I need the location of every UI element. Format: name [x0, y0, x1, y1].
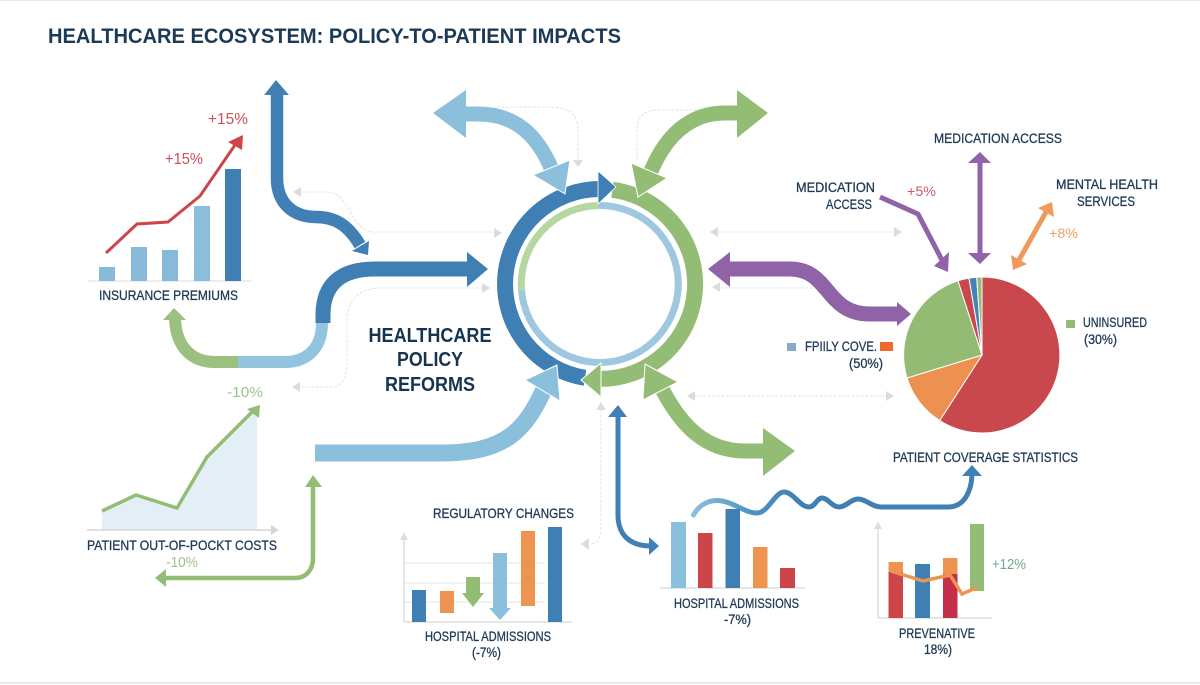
- callout: mental health services: SERVICES: [1077, 194, 1135, 209]
- heading: healthcare policy reforms: [368, 324, 492, 396]
- panel: insurance premiums chart: [88, 111, 252, 303]
- callout: medication access left: +5%: [907, 183, 936, 199]
- callout: medication access left: ACCESS: [826, 197, 872, 212]
- inner ring: [521, 205, 678, 362]
- arrow: lower-right green double arrow: [643, 364, 795, 476]
- panel: patient out-of-pocket costs chart: PATIENT OUT-OF-POCKT COSTS: [87, 538, 277, 553]
- arrow: purple to coverage pie: [708, 252, 911, 326]
- heading: healthcare policy reforms: REFORMS: [385, 373, 475, 396]
- callout: mental health services: MENTAL HEALTH: [1056, 177, 1158, 192]
- panel: preventative care chart: +12%: [992, 557, 1026, 573]
- legend: family coverage: FPIILY COVE.: [805, 339, 877, 354]
- panel: regulatory changes chart: REGULATORY CHANGES: [433, 506, 574, 521]
- panel: preventative care chart: 18%): [924, 642, 952, 657]
- callout: medication access top: MEDICATION ACCESS: [934, 131, 1062, 146]
- heading: healthcare policy reforms: HEALTHCARE: [368, 324, 492, 347]
- callout: medication access top: [934, 131, 1062, 264]
- outer ring green arc: [581, 190, 695, 397]
- panel: insurance premiums chart: +15%: [165, 151, 203, 168]
- title: HEALTHCARE ECOSYSTEM: POLICY-TO-PATIENT IMPACTS: [48, 25, 621, 48]
- callout: mental health services: +8%: [1049, 225, 1078, 241]
- panel: patient coverage pie chart: [904, 277, 1060, 433]
- legend: family coverage: (50%): [849, 356, 883, 371]
- panel: hospital admissions chart: HOSPITAL ADMISSIONS: [674, 596, 799, 611]
- callout: medication access left: [796, 180, 949, 272]
- panel: hospital admissions chart: [660, 509, 805, 627]
- panel: regulatory changes chart: HOSPITAL ADMISSIONS: [425, 629, 551, 644]
- label: patient coverage statistics: PATIENT COVERAGE STATISTICS: [893, 450, 1078, 465]
- legend: family coverage: [787, 339, 893, 371]
- arrow: thin green under out-of-pocket: [155, 475, 322, 587]
- arrow: wavy line to patient coverage statistics: [694, 465, 982, 515]
- legend: uninsured: UNINSURED: [1083, 315, 1147, 330]
- panel: regulatory changes chart: [400, 506, 574, 660]
- outer ring blue arrowhead: [598, 171, 616, 204]
- panel: insurance premiums chart: INSURANCE PREMIUMS: [99, 288, 238, 303]
- panel: preventative care chart: [874, 521, 1026, 657]
- panel: patient out-of-pocket costs chart: -10%: [166, 554, 198, 571]
- panel: insurance premiums chart: +15%: [208, 111, 248, 128]
- arrow: lower-left light blue: [315, 365, 560, 453]
- callout: mental health services: [1011, 177, 1158, 270]
- outer ring blue arc: [505, 189, 600, 378]
- panel: preventative care chart: PREVENATIVE: [899, 626, 975, 641]
- panel: regulatory changes chart: (-7%): [472, 645, 501, 660]
- panel: hospital admissions chart: -7%): [724, 612, 751, 627]
- legend: uninsured: [1066, 315, 1147, 347]
- center ring: reform cycle: [505, 171, 695, 397]
- heading: healthcare policy reforms: POLICY: [397, 348, 463, 371]
- panel: patient out-of-pocket costs chart: -10%: [227, 384, 263, 401]
- dashed connectors: [292, 107, 902, 550]
- arrow: thin blue from ring to hospital chart: [608, 405, 659, 555]
- arrow: blue, light blue and green multi-segment: [163, 252, 488, 362]
- callout: medication access left: MEDICATION: [796, 180, 875, 195]
- legend: uninsured: (30%): [1084, 332, 1117, 347]
- arrow: top-right green double arrow: [631, 90, 768, 197]
- arrow: top-left light blue double arrow: [433, 90, 570, 194]
- arrow: blue up from insurance to ring: [264, 80, 369, 255]
- panel: patient out-of-pocket costs chart: [87, 384, 279, 571]
